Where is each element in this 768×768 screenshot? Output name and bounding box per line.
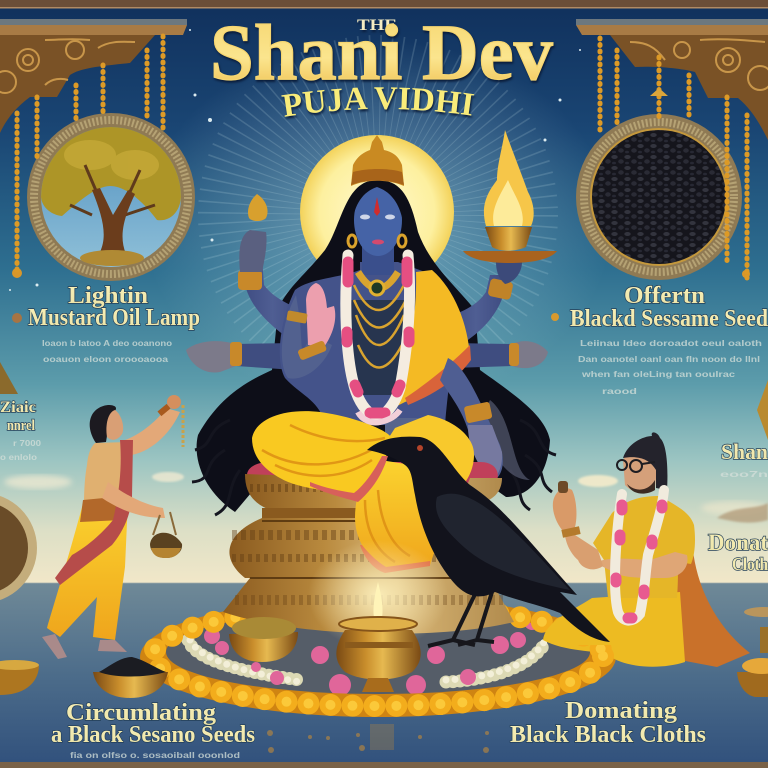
left upper ornament	[0, 362, 18, 394]
deity rear arms	[186, 194, 548, 373]
pot foot	[362, 678, 394, 692]
yellow sash	[385, 270, 470, 412]
ground	[156, 602, 600, 702]
pot base	[151, 548, 181, 558]
lower left bangle	[230, 342, 242, 366]
root base	[80, 250, 144, 266]
tilak	[374, 197, 380, 216]
front bracelet	[297, 340, 327, 361]
stand	[760, 627, 768, 653]
lower tier	[223, 578, 514, 634]
description line two: ooauon eloon oroooaooa	[43, 355, 169, 364]
heading: Circumlating	[66, 700, 216, 726]
description line four: raood	[602, 387, 637, 396]
flame	[484, 130, 534, 226]
step fragment: left edge	[0, 399, 42, 462]
dotted cornice	[0, 19, 187, 25]
pink clusters	[201, 614, 540, 696]
red hem	[310, 456, 388, 502]
black crow	[367, 437, 610, 646]
fourth line: o enlolo	[0, 453, 37, 462]
heading: Domating	[565, 698, 677, 724]
left medallion with tree	[27, 113, 195, 281]
right worshipper	[543, 432, 750, 667]
third line: r 7000	[13, 439, 42, 448]
gold ring	[27, 113, 195, 281]
step fragment: left edge: Ziaic	[0, 399, 36, 416]
hair	[90, 405, 116, 443]
back leg and dhoti	[47, 500, 128, 640]
white flowers highlights	[190, 640, 544, 682]
feet	[42, 634, 127, 659]
upper dhoti band	[80, 496, 125, 522]
lower left hand	[186, 341, 236, 373]
description: fia on olfso o. sosaoiball ooonlod	[70, 751, 240, 760]
beam	[0, 25, 187, 35]
bell pendant	[650, 88, 668, 96]
face	[106, 410, 123, 440]
step: mustard oil lamp	[28, 283, 200, 364]
red sash	[55, 440, 133, 585]
mid waist	[262, 508, 487, 522]
gold ornament	[248, 194, 268, 221]
sesame mound	[99, 657, 166, 676]
donation heading: Donat	[708, 530, 768, 555]
left raised hand	[239, 230, 267, 272]
ground speckles	[267, 724, 489, 753]
second line: nnrel	[7, 418, 35, 434]
hand	[167, 395, 181, 409]
right corner toran	[576, 19, 768, 278]
marigold band	[140, 597, 616, 717]
neck	[362, 245, 394, 275]
lower hem	[360, 545, 430, 573]
small line: eoo7n	[720, 470, 768, 479]
bowl	[229, 632, 298, 662]
subheading: a Black Sesano Seeds	[51, 722, 255, 748]
lower right arm	[452, 343, 512, 368]
carved scrolls	[630, 39, 768, 90]
step: circumambulating	[51, 700, 255, 760]
hairline	[350, 182, 405, 222]
lower right bangle	[509, 343, 519, 366]
offering stream	[182, 405, 184, 447]
carved arch	[0, 35, 155, 133]
lower right hand	[512, 341, 548, 368]
description: Leiinau ldeo doroadot oeul oaloth	[580, 339, 762, 348]
lips	[372, 240, 384, 244]
right medallion with sesame seeds	[576, 114, 742, 280]
left coin medallion	[0, 493, 37, 603]
shani dev: Shani Dev	[210, 10, 553, 97]
lamp glow	[308, 540, 448, 650]
shirt	[593, 496, 695, 598]
right bowls	[737, 607, 768, 697]
eyes	[360, 214, 395, 220]
bangle	[157, 404, 171, 416]
bulge tier	[229, 518, 501, 578]
carved bands	[232, 488, 505, 600]
upper left bracelets	[238, 270, 262, 290]
the: THE	[357, 17, 397, 34]
right hand under tray	[496, 262, 522, 284]
pot band	[345, 642, 413, 648]
upper right arm	[445, 275, 507, 352]
raised hand	[553, 488, 576, 530]
canopy highlights	[64, 140, 159, 180]
pink raised hand	[306, 283, 335, 347]
held offering	[558, 481, 568, 493]
tree branches	[70, 165, 155, 215]
gold offering pot	[229, 617, 298, 662]
description line two: Dan oanotel oanl oan fln noon do llnl	[578, 355, 760, 364]
hanging pot	[150, 533, 182, 558]
upper left arm	[240, 258, 305, 345]
orange cape	[668, 540, 750, 667]
main title	[210, 10, 556, 120]
lower left arm	[235, 343, 295, 370]
tree trunk	[92, 188, 135, 254]
yellow seated legs	[252, 410, 474, 573]
right upper ornament	[757, 380, 768, 440]
tray	[463, 251, 557, 263]
beard	[627, 480, 655, 494]
plate	[744, 607, 768, 617]
seated legs	[543, 592, 685, 667]
deity body	[280, 135, 503, 478]
subheading: Mustard Oil Lamp	[28, 305, 200, 331]
marigold foreground arc	[430, 645, 614, 715]
step: black sesame seeds	[570, 283, 768, 396]
right leg	[384, 415, 474, 486]
upper arm band	[286, 310, 308, 324]
red cushion	[247, 462, 498, 488]
marigold beads	[153, 606, 603, 706]
seed bowl	[93, 672, 168, 698]
description: Ioaon b Iatoo A deo ooanono	[42, 339, 172, 348]
gold bowl	[0, 666, 39, 695]
marigold highlights	[153, 606, 603, 706]
step: donating black cloths	[510, 698, 706, 748]
dotted cornice	[576, 19, 768, 25]
subheading: Black Black Cloths	[510, 722, 706, 748]
left corner toran	[0, 19, 187, 272]
heading: Lightin	[68, 283, 148, 309]
carved arch	[610, 35, 768, 140]
legs	[428, 590, 494, 646]
inner sky	[41, 127, 181, 267]
pot rim	[339, 617, 417, 631]
hanging beads	[600, 38, 747, 278]
puja vidhi on an arc: PUJA VIDHI	[281, 87, 476, 120]
upper right bracelet	[487, 278, 514, 300]
tree canopy	[41, 127, 181, 220]
left worshipper	[42, 395, 183, 659]
description line three: when fan oleLing tan ooulrac	[581, 370, 736, 379]
raised front arm	[282, 295, 332, 379]
garland	[615, 490, 664, 621]
flame tray in upper right hand	[463, 130, 557, 263]
lower drape	[355, 460, 445, 570]
right hand	[468, 425, 502, 478]
edge ornaments	[0, 362, 768, 603]
carved scrolls	[0, 39, 135, 93]
hanging beads	[17, 36, 163, 272]
body	[367, 437, 610, 642]
front arm	[102, 482, 165, 518]
bowl contents	[742, 658, 768, 674]
bowl contents	[232, 617, 296, 639]
right front bracelet	[464, 401, 493, 424]
left leg	[252, 411, 392, 497]
necklaces	[354, 272, 406, 368]
pot body	[336, 630, 421, 680]
hair	[623, 432, 667, 490]
brass oil lamp with flame	[336, 582, 421, 692]
belly garland end	[358, 410, 400, 423]
wing	[436, 494, 570, 590]
raised arm	[125, 408, 180, 455]
step fragment: right edge	[708, 439, 768, 574]
bracelet	[561, 526, 581, 538]
torso	[280, 262, 455, 425]
head	[354, 184, 402, 256]
fold lines	[262, 425, 410, 562]
top tier	[245, 474, 502, 512]
pedestal	[223, 462, 514, 634]
flower garland	[346, 255, 410, 418]
glasses	[617, 460, 655, 472]
raised arm	[565, 535, 603, 569]
right front arm	[440, 358, 503, 478]
dark midriff	[345, 300, 415, 395]
forearm to lower hand	[595, 552, 688, 578]
left bowls	[0, 657, 168, 698]
heading: Offertn	[624, 283, 705, 309]
blue gap	[385, 418, 440, 444]
head	[623, 451, 658, 492]
halo behind the deity	[300, 135, 454, 289]
sash stripes	[405, 345, 471, 405]
flame	[373, 582, 383, 628]
lamp bowl	[485, 227, 532, 251]
flower ring base	[140, 597, 616, 717]
deity hair	[192, 180, 556, 515]
earrings	[348, 235, 406, 247]
pendant	[370, 281, 384, 295]
black seeds	[592, 130, 726, 264]
pot handle	[153, 512, 176, 535]
crown	[351, 135, 404, 186]
eye	[417, 445, 423, 451]
gold ring	[576, 114, 742, 280]
torso	[84, 442, 128, 503]
white flowers	[188, 640, 546, 682]
step fragment: right edge: Shan	[721, 439, 768, 464]
beam	[576, 25, 768, 35]
